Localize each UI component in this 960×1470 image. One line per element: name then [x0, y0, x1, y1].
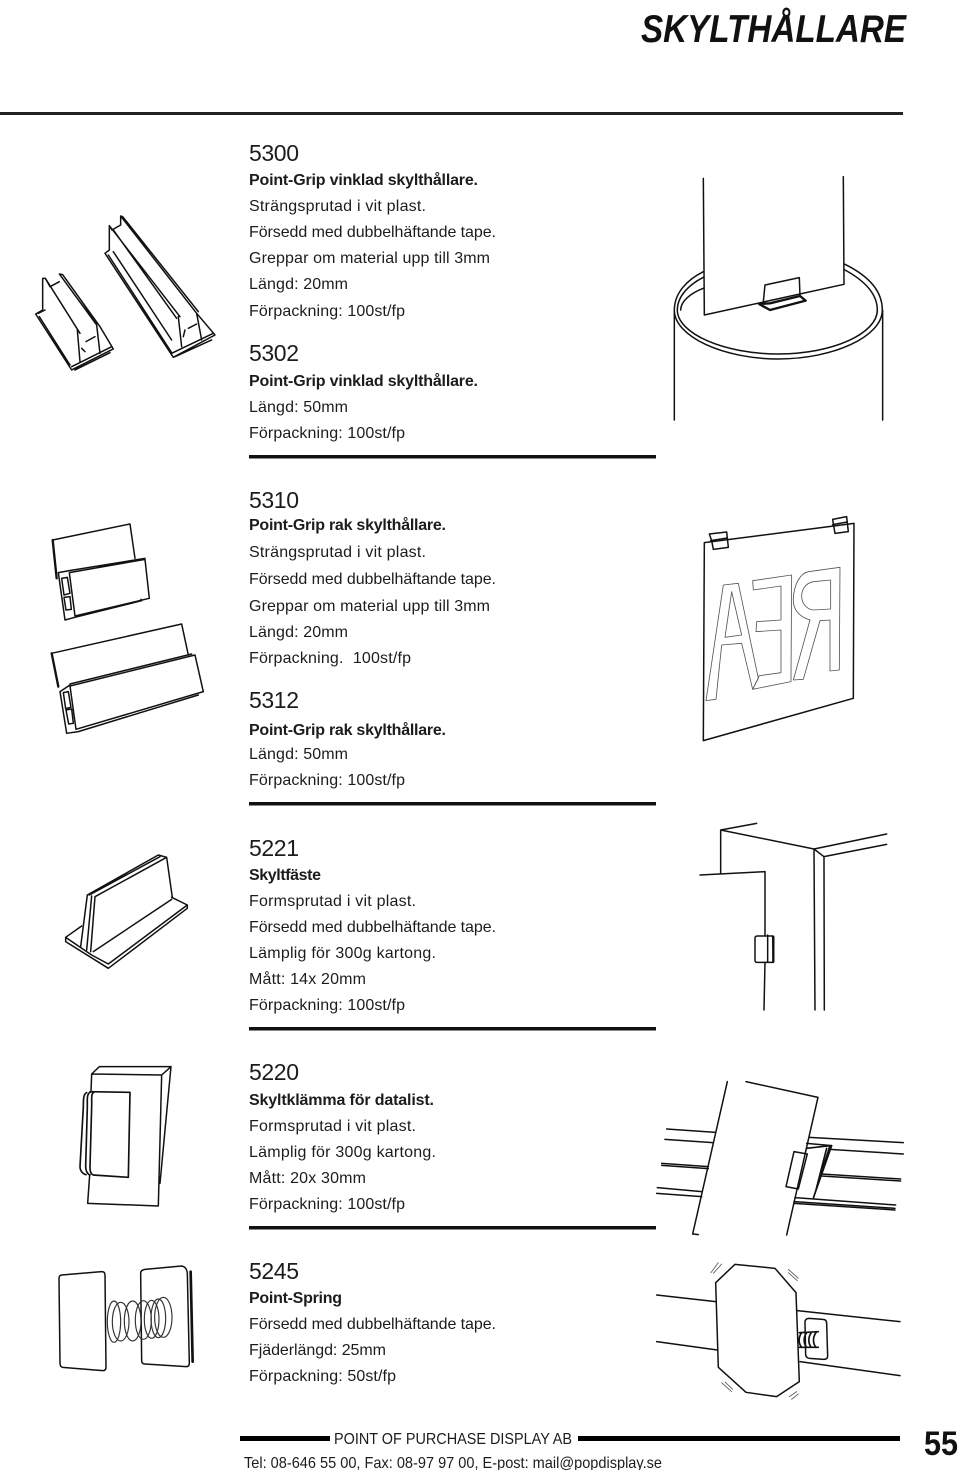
illustration: clamp on shelf rails [657, 1082, 903, 1235]
illustration: data-strip clamp 5220 [80, 1067, 171, 1206]
text block: 5302: 5302 [249, 340, 299, 366]
text block: 5310: 5310 [249, 487, 299, 513]
text block: 5220: Skyltklämma för datalist. [249, 1092, 434, 1109]
text block: 5221: 5221 [249, 835, 299, 861]
text block: 5310: Längd: 20mm [249, 624, 348, 641]
text block: 5221: Förpackning: 100st/fp [249, 997, 405, 1014]
text block: 5300: Förpackning: 100st/fp [249, 303, 405, 320]
text block: 5220: Formsprutad i vit plast. [249, 1118, 416, 1135]
text block: 5300 [249, 140, 496, 320]
text block: 5310: Förpackning. 100st/fp [249, 650, 411, 667]
text block: 5220: Lämplig för 300g kartong. [249, 1144, 436, 1161]
page title: SKYLTHÅLLARE [641, 8, 907, 51]
text block: 5310: Point-Grip rak skylthållare. [249, 516, 446, 534]
text block: 5300: Längd: 20mm [249, 276, 348, 293]
text block: 5221: Formsprutad i vit plast. [249, 893, 416, 910]
text block: 5302 [249, 340, 478, 442]
text block: 5245 [249, 1258, 496, 1385]
text block: 5221 [249, 835, 496, 1014]
text block: 5312 [249, 687, 446, 789]
text block: 5245: 5245 [249, 1258, 299, 1284]
footer company line: POINT OF PURCHASE DISPLAY AB [334, 1431, 572, 1448]
illustration: angled Point-Grip holders 5300 and 5302 [36, 216, 215, 370]
text block: 5300: Greppar om material upp till 3mm [249, 250, 490, 267]
text block: 5312: Längd: 50mm [249, 746, 348, 763]
text block: 5300: Strängsprutad i vit plast. [249, 198, 426, 215]
text block: 5312: 5312 [249, 687, 299, 713]
text block: 5302: Förpackning: 100st/fp [249, 425, 405, 442]
text block: 5310 [249, 487, 496, 667]
text block: 5302: Point-Grip vinklad skylthållare. [249, 372, 478, 390]
text block: 5310: Strängsprutad i vit plast. [249, 544, 426, 561]
text block: 5220: Förpackning: 100st/fp [249, 1196, 405, 1213]
text block: 5312: Förpackning: 100st/fp [249, 772, 405, 789]
text block: 5221: Mått: 14x 20mm [249, 970, 366, 988]
text block: 5220 [249, 1059, 436, 1213]
illustration: spring 5245 [59, 1266, 193, 1371]
illustration: REA sign hung with clips [703, 517, 854, 741]
text block: 5312: Point-Grip rak skylthållare. [249, 721, 446, 739]
text block: 5300: 5300 [249, 140, 299, 166]
text block: 5221: Skyltfäste [249, 867, 321, 884]
header rule [0, 112, 903, 115]
text block: 5220: 5220 [249, 1059, 299, 1085]
text block: 5245: Försedd med dubbelhäftande tape. [249, 1316, 496, 1333]
text block: 5245: Fjäderlängd: 25mm [249, 1342, 386, 1359]
text block: 5300: Point-Grip vinklad skylthållare. [249, 171, 478, 189]
text block: 5310: Försedd med dubbelhäftande tape. [249, 571, 496, 588]
text block: 5221: Försedd med dubbelhäftande tape. [249, 919, 496, 936]
footer company line [240, 1431, 900, 1448]
text block: 5220: Mått: 20x 30mm [249, 1169, 366, 1187]
illustration: spring-mounted sign on rail [657, 1263, 900, 1399]
illustration: straight Point-Grip holders 5310 and 5312 [52, 524, 203, 733]
text block: 5302: Längd: 50mm [249, 399, 348, 416]
text block: 5221: Lämplig för 300g kartong. [249, 945, 436, 962]
text block: 5300: Försedd med dubbelhäftande tape. [249, 224, 496, 241]
text block: 5245: Point-Spring [249, 1290, 342, 1307]
illustration: sign in holder on cylinder [674, 177, 883, 420]
text block: 5245: Förpackning: 50st/fp [249, 1368, 396, 1385]
text block: 5310: Greppar om material upp till 3mm [249, 598, 490, 615]
illustration: bracket on cabinet door [700, 823, 887, 1010]
illustration: sign bracket 5221 [66, 855, 187, 968]
